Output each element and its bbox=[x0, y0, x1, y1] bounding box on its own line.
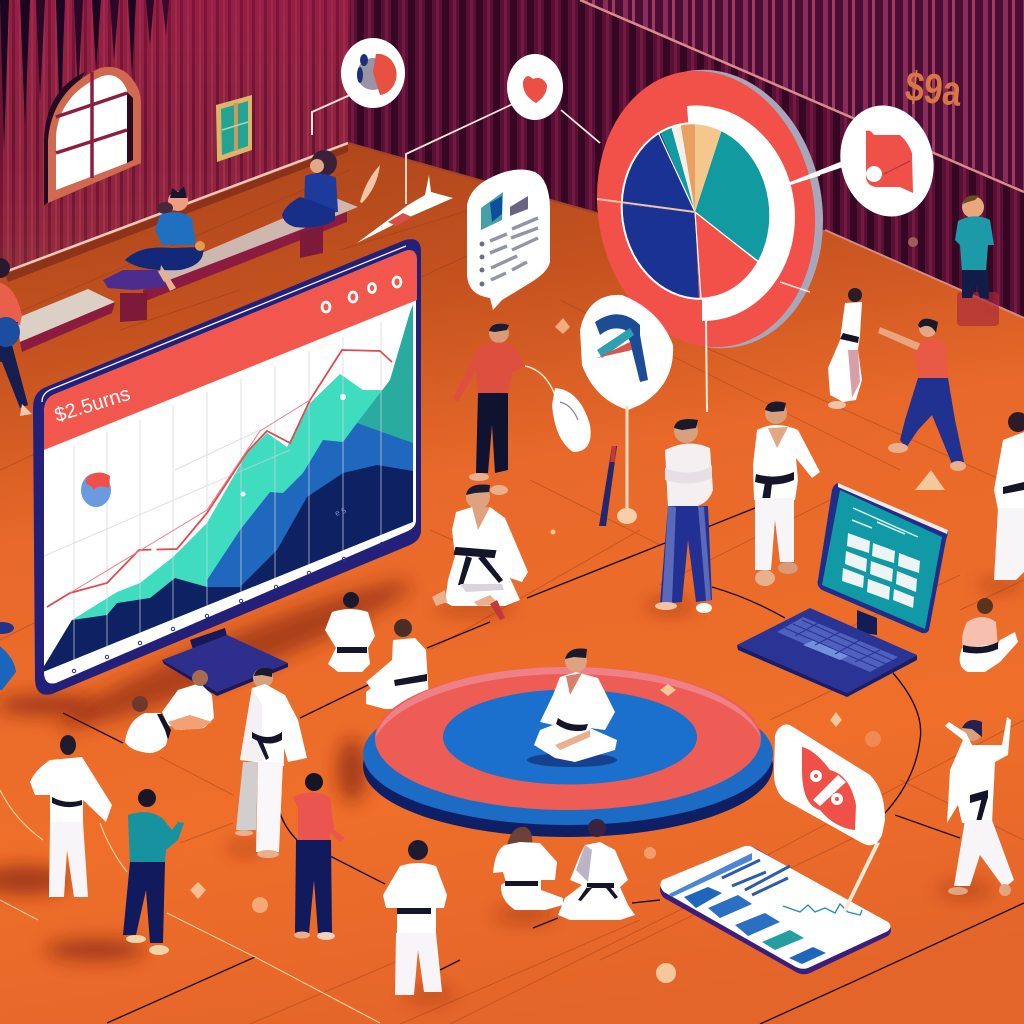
person: white gi far left bbox=[30, 735, 112, 897]
floor shadows bbox=[0, 581, 1022, 999]
paper plane bbox=[357, 165, 453, 243]
callout: pie bubble bbox=[312, 38, 405, 135]
person: seated blue on bench bbox=[125, 186, 205, 291]
back wall left bbox=[0, 0, 350, 282]
person: seated front right bbox=[558, 819, 635, 920]
person: seated center top bbox=[432, 484, 528, 620]
floating confetti bbox=[190, 237, 945, 983]
person: seated navy on bench bbox=[282, 150, 338, 228]
person: red top lunging bbox=[878, 319, 966, 471]
wall sign: $9a bbox=[903, 62, 964, 115]
person: small gi by wall bbox=[828, 288, 862, 409]
person: seated front left bbox=[493, 827, 563, 910]
chart areas bbox=[43, 305, 413, 672]
bench with two seated people bbox=[103, 197, 358, 322]
tablet with charts bbox=[660, 842, 891, 974]
person: teal shirt standing by wall bbox=[955, 195, 999, 326]
callout: pin bubble bbox=[580, 295, 673, 524]
person: reclining pair bbox=[125, 670, 214, 753]
mat platform bbox=[363, 667, 773, 837]
person: red shirt explaining bbox=[453, 323, 555, 495]
person: seated back view near monitor bbox=[325, 592, 375, 672]
bench left bbox=[17, 289, 115, 352]
small speech note bbox=[552, 388, 591, 452]
monitor header bar: $2.5urns bbox=[52, 383, 133, 427]
small pie bbox=[81, 472, 111, 507]
person: seated right bbox=[960, 598, 1018, 672]
pen bbox=[599, 446, 617, 526]
window bbox=[44, 67, 141, 206]
person: walking gi bbox=[945, 717, 1014, 896]
callout: right bubble bbox=[829, 96, 945, 226]
person: gi standing center right bbox=[753, 402, 820, 586]
person: crossed arms bbox=[655, 419, 713, 613]
document speech bubble bbox=[467, 170, 550, 310]
monitor header bar bbox=[44, 250, 417, 450]
person: gi back view lower bbox=[383, 840, 447, 995]
person: seated side view bbox=[366, 619, 429, 709]
person: tall gi standing bbox=[235, 668, 307, 858]
person: red shirt lower bbox=[293, 773, 345, 940]
person: left edge red shirt bbox=[0, 258, 32, 416]
person: gi right edge bbox=[994, 412, 1024, 580]
callout: percent tag bbox=[774, 724, 885, 845]
laptop bbox=[737, 483, 948, 697]
person: seated on mat bbox=[527, 648, 617, 767]
pie chart disc bbox=[596, 70, 842, 412]
large monitor with area chart bbox=[33, 239, 421, 695]
person: left edge navy figure bbox=[0, 622, 16, 690]
person: teal shirt left bbox=[123, 789, 184, 955]
wall picture bbox=[216, 95, 252, 162]
back wall right bbox=[348, 0, 1024, 318]
monitor shadow bbox=[51, 565, 419, 745]
callout: heart bubble bbox=[406, 54, 600, 204]
monitor stand bbox=[162, 628, 288, 696]
large monitor with area chart: e 5 bbox=[334, 506, 348, 518]
